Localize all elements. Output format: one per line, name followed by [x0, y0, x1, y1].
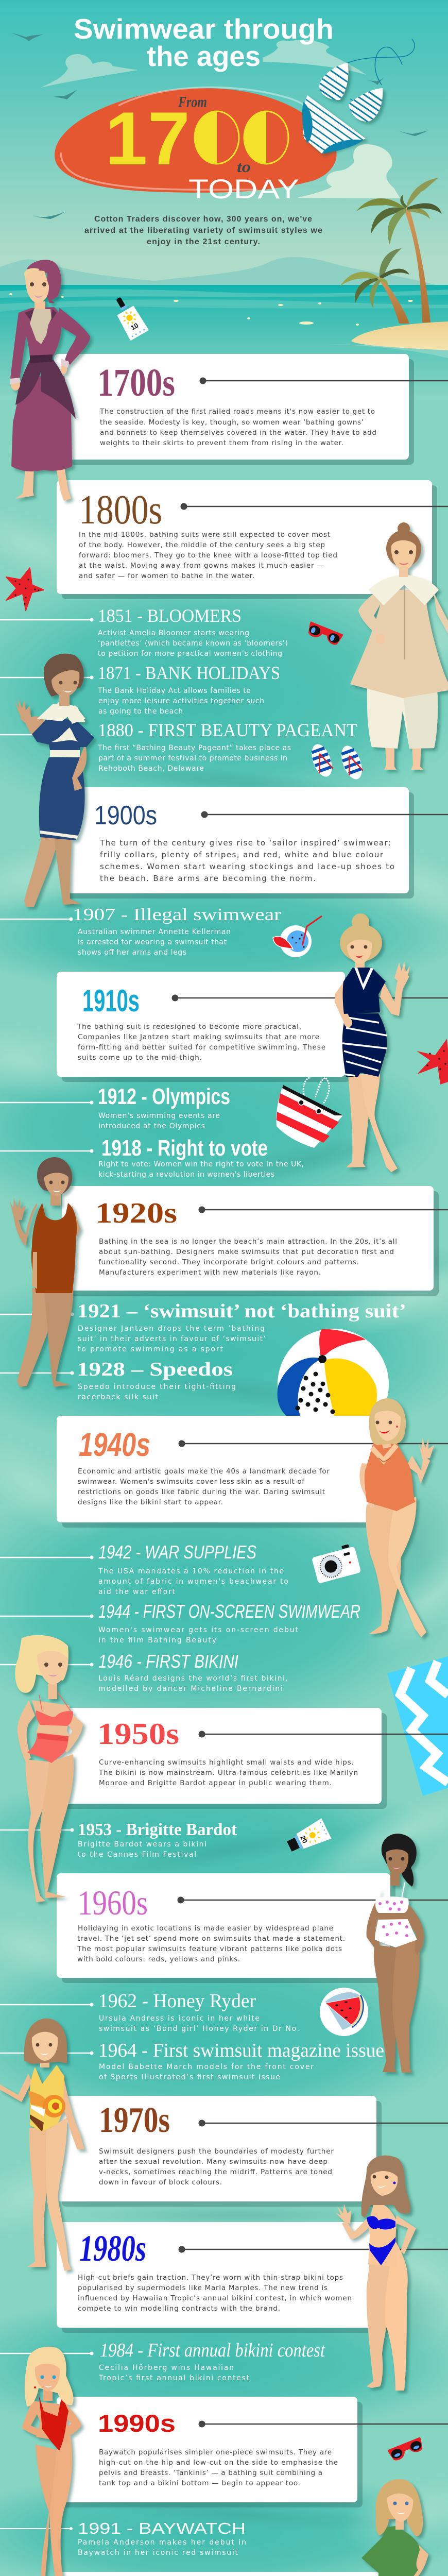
panel: 1700s	[54, 354, 448, 465]
text: 1910s: suits come up to the mid-thigh.	[78, 1054, 202, 1062]
heading: 1940s: 1940s	[79, 1426, 150, 1463]
text: 1928: racerback silk suit	[78, 1393, 159, 1401]
text: 1960s: The most popular swimsuits feature vibrant patterns like polka dots	[77, 1945, 342, 1953]
text: 1921: Designer Jantzen drops the term ‘bathing	[78, 1325, 265, 1333]
heading: 1920s: 1920s	[95, 1197, 177, 1229]
text: 1946: modelled by dancer Micheline Bernardini	[98, 1685, 283, 1693]
intro text: enjoy in the 21st century.	[147, 238, 260, 246]
heading: 1910s: 1910s	[82, 984, 140, 1018]
text: 1900s: The turn of the century gives rise to ‘sailor inspired’ swimwear:	[99, 838, 391, 848]
from: From	[178, 93, 207, 111]
timeline: 1912	[0, 1084, 230, 1130]
text: 1871: enjoy more leisure activities together such	[98, 697, 264, 705]
icon: starfish	[6, 568, 44, 611]
icon: striped bikini	[302, 39, 415, 158]
text: 1800s: of the body. However, the middle of the century sees a big step	[79, 541, 325, 549]
text: 1962	[99, 2014, 299, 2033]
text: 1964: of Sports Illustrated’s first swimsuit issue	[99, 2073, 280, 2081]
island	[322, 321, 448, 358]
text: 1970s: down in favour of block colours.	[99, 2178, 222, 2187]
text: 1964	[99, 2063, 314, 2081]
text: 1940s: Economic and artistic goals make the 40s a landmark decade for	[78, 1467, 330, 1476]
timeline: 1984	[0, 2340, 325, 2382]
text: 1920s: Bathing in the sea is no longer the beach’s main attraction. In the 20s, it’s all	[99, 1238, 397, 1246]
text: 1950s: Curve-enhancing swimsuits highlight small waists and wide hips.	[99, 1758, 354, 1767]
figure: 1950s woman	[15, 1635, 83, 1902]
icon: cocktail	[273, 916, 322, 957]
figure: 1980s woman	[336, 2156, 416, 2391]
text: 1970s: Swimsuit designers push the boundaries of modesty further	[99, 2147, 334, 2156]
text: 1928	[78, 1383, 236, 1401]
text: 1800s: and safer — for women to bathe in the water.	[79, 572, 254, 580]
text: 1880	[97, 744, 291, 773]
timeline: 1964	[0, 2040, 384, 2081]
text: 1991: Pamela Anderson makes her debut in	[78, 2538, 246, 2547]
figure: 1970s woman	[0, 2019, 84, 2271]
text: 1912	[98, 1112, 220, 1130]
heading: 1960s: 1960s	[78, 1883, 148, 1922]
text: 1940s: swimwear. Women's swimsuits cover less skin as a result of	[78, 1478, 305, 1486]
text: 1980s: compete to win modelling contracts with the brand.	[78, 2304, 280, 2313]
text: 1918	[98, 1160, 304, 1179]
text: 1984: Cecilia Hörberg wins Hawaiian	[99, 2364, 234, 2372]
text: 1960s: Holidaying in exotic locations is made easier by widespread plane	[78, 1924, 333, 1933]
today: TODAY	[188, 174, 299, 205]
text: 1900s: frilly collars, plenty of stripes, and red, white and blue colour	[100, 850, 384, 859]
figure: 1910s woman	[335, 913, 410, 1172]
text: 1946	[98, 1674, 288, 1693]
text: 1910s	[77, 1023, 325, 1062]
palm trees	[340, 178, 442, 324]
text: 1950s: Monroe and Brigitte Bardot appear in public wearing them.	[99, 1779, 332, 1787]
figure: 1940s woman	[359, 1398, 434, 1637]
panel: 2000s	[57, 2572, 448, 2576]
text: 1921: to promote swimming as a sport	[78, 1345, 223, 1353]
text: 1984: Tropic’s first annual bikini contest	[98, 2374, 250, 2382]
heading: 1700s: 1700s	[97, 361, 175, 404]
text: 1990s: Baywatch popularises simpler one-piece swimsuits. They are	[99, 2448, 332, 2456]
text: 1800s: forward: bloomers. They go to the knee with a loose-fitted top tied	[79, 551, 337, 560]
panel: 1950s	[57, 1708, 448, 1809]
timeline: 1944	[0, 1601, 360, 1645]
text: 1953	[78, 1840, 206, 1859]
panel: 1910s	[57, 972, 448, 1082]
zeros of 1700	[194, 111, 288, 164]
icon: camera	[311, 1543, 361, 1584]
text: 1700s: and bonnets to keep themselves covered in the water. They have to add	[100, 429, 376, 437]
heading: 1851: 1851 - BLOOMERS	[98, 605, 242, 626]
figure: 1900s woman	[15, 654, 94, 907]
text: 1953: Brigitte Bardot wears a bikini	[78, 1840, 206, 1849]
icon: sun cream bottle: 10	[129, 321, 140, 332]
figure: 1700s woman	[10, 260, 90, 501]
text: 1970s	[99, 2147, 334, 2187]
text: 1700s: weights to their skirts to prevent them from rising in the water.	[100, 439, 343, 447]
text: 1942: aid the war effort	[98, 1588, 175, 1596]
text: 1942: The USA mandates a 10% reduction in the	[98, 1567, 284, 1575]
text: 1921: suit’ in their adverts in favour of ‘swimsuit’	[78, 1335, 266, 1343]
text: 1871: as going to the beach	[98, 707, 183, 716]
timeline: 1928	[0, 1359, 236, 1401]
text: 1944: Women's swimwear gets its on-screen debut	[98, 1626, 299, 1634]
text: 1990s: high-cut on the hip and low-cut on the side to emphasise the	[99, 2459, 338, 2467]
text: 1942	[98, 1567, 288, 1596]
text: 1912: Women’s swimming events are	[98, 1112, 220, 1120]
to: to	[237, 158, 251, 176]
heading: 1907: 1907 - Illegal swimwear	[73, 905, 282, 924]
panel: 1900s	[62, 787, 448, 899]
text: 1950s	[98, 1758, 358, 1787]
heading: 1964: 1964 - First swimsuit magazine issue	[98, 2040, 384, 2061]
icon: sunglasses lower	[388, 2437, 425, 2463]
text: 1980s: popularised by supermodels like Marla Marples. The new trend is	[78, 2284, 328, 2292]
heading: 1980s: 1980s	[79, 2228, 146, 2269]
text: 1962: swimsuit as ‘Bond girl’ Honey Ryder in Dr No.	[99, 2025, 299, 2033]
text: 1960s	[77, 1924, 345, 1963]
heading: 1942: 1942 - WAR SUPPLIES	[98, 1541, 256, 1563]
intro text: Cotton Traders discover how, 300 years on, we've	[94, 215, 312, 224]
icon: beach ball	[278, 1329, 389, 1440]
figure: 1920s woman	[10, 1157, 80, 1387]
text: 1900s	[99, 838, 394, 883]
icon: sun cream bottle	[110, 293, 148, 340]
connector	[177, 1897, 448, 1903]
sea	[0, 285, 448, 401]
text: 1871	[97, 687, 264, 716]
connector	[199, 2420, 448, 2428]
icon: sun cream tube	[284, 1818, 331, 1857]
background: sky	[0, 0, 448, 289]
heading: 1950s: 1950s	[97, 1717, 179, 1751]
cloud: lower right	[297, 144, 400, 198]
text: 1953: to the Cannes Film Festival	[78, 1851, 196, 1859]
connector	[180, 503, 448, 510]
text: 1920s: functionality second. They incorporate bright colours and patterns.	[98, 1258, 359, 1266]
connector	[199, 2120, 448, 2127]
timeline: 1946	[0, 1651, 288, 1693]
text: 1918: kick-starting a revolution in women's liberties	[98, 1171, 274, 1179]
timeline: 1880	[0, 720, 357, 773]
connector	[172, 994, 448, 1002]
mountains	[0, 257, 448, 289]
text: 1907: is arrested for wearing a swimsuit that	[78, 938, 227, 946]
panel: 1970s	[57, 2096, 448, 2207]
connector	[201, 811, 448, 818]
text: 1962: Ursula Andress is iconic in her white	[99, 2014, 260, 2023]
timeline: 1962	[0, 1990, 299, 2033]
year 1700: 00	[199, 122, 265, 156]
text: 1940s: designs like the bikini start to appear.	[78, 1498, 223, 1506]
heading: 1944: 1944 - FIRST ON-SCREEN SWIMWEAR	[98, 1601, 360, 1622]
text: 1944	[98, 1626, 299, 1645]
panel: 1990s	[57, 2397, 448, 2507]
heading: 1912: 1912 - Olympics	[98, 1084, 230, 1109]
timeline: 1871	[0, 663, 280, 716]
connector	[178, 1440, 448, 1447]
title: Swimwear through	[74, 13, 334, 45]
intro text: arrived at the liberating variety of swimsuit styles we	[84, 226, 322, 235]
text: 1912: introduced at the Olympics	[98, 1122, 205, 1130]
text: 1907: Australian swimmer Annette Kellerman	[78, 928, 231, 936]
text: 1984	[98, 2364, 250, 2382]
icon: sun cream tube: 20	[299, 1834, 309, 1844]
text: 1900s: schemes. Women start wearing stockings and lace-up shoes to	[100, 862, 394, 871]
figure: 1990s woman	[22, 2347, 81, 2576]
timeline: 1991	[0, 2519, 246, 2557]
connector	[199, 1731, 448, 1737]
timeline: 1907	[0, 905, 282, 957]
icon: striped towel	[387, 1656, 448, 1796]
heading: 1880: 1880 - FIRST BEAUTY PAGEANT	[98, 720, 357, 740]
text: 1851	[98, 629, 288, 658]
text: 1990s	[99, 2448, 338, 2487]
intro text	[84, 215, 322, 246]
panel: 1940s	[57, 1416, 448, 1528]
heading: 1946: 1946 - FIRST BIKINI	[98, 1651, 238, 1672]
text: 1921	[78, 1325, 266, 1353]
text: 1907	[78, 928, 231, 957]
text: 1970s: after the sexual revolution. Many swimsuits now have deep	[99, 2158, 328, 2166]
text: 1944: in the film Bathing Beauty	[98, 1636, 216, 1645]
figure: 1960s woman	[367, 1834, 424, 2073]
text: 1928: Speedo introduce their tight-fitting	[78, 1383, 236, 1391]
text: 1970s: v-necks, sometimes reaching the midriff. Patterns are toned	[99, 2168, 332, 2176]
text: 1910s: The bathing suit is redesigned to become more practical.	[77, 1023, 301, 1031]
text: 1960s: travel. The ‘jet set’ spend more on swimsuits that made a statement.	[77, 1935, 345, 1943]
birds	[11, 33, 428, 219]
figure: 1800s woman	[350, 522, 448, 770]
text: 1851: ‘pantlettes’ (which became known as ‘bloomers’)	[98, 639, 288, 648]
text: 1940s	[78, 1467, 330, 1506]
text: 1900s: the beach. Bare arms are becoming the norm.	[100, 874, 316, 883]
text: 1991	[78, 2538, 246, 2557]
text: 1980s: High-cut briefs gain traction. They’re worn with thin-strap bikini tops	[78, 2274, 343, 2282]
connector	[199, 1207, 448, 1213]
text: 1940s: restrictions on goods like fabric during the war. Daring swimsuit	[78, 1488, 325, 1496]
text: 1980s	[78, 2274, 352, 2313]
text: 1880: Rehoboth Beach, Delaware	[98, 765, 204, 773]
icon: sunglasses	[306, 621, 343, 647]
heading: 1962: 1962 - Honey Ryder	[98, 1990, 256, 2012]
connector	[178, 2246, 448, 2252]
text: 1991: Baywatch in her iconic red swimsuit	[78, 2549, 238, 2557]
heading: 1984: 1984 - First annual bikini contest	[100, 2340, 325, 2361]
heading: 1991: 1991 - BAYWATCH	[78, 2519, 246, 2537]
panel: 1980s	[57, 2222, 448, 2333]
text: 1980s: influenced by Hawaiian Tropic’s annual bikini contest, in which women	[78, 2294, 352, 2302]
year 1700: 17	[105, 96, 190, 180]
icon: watermelon plate small	[320, 1988, 368, 2036]
text: 1964: Model Babette March models for the front cover	[99, 2063, 314, 2071]
sea highlights	[0, 289, 448, 312]
panel: 1960s	[57, 1873, 448, 1983]
timeline: 1851	[0, 605, 288, 658]
heading: 1900s: 1900s	[94, 801, 157, 831]
text: 1920s	[98, 1238, 397, 1277]
text: 1800s: at the waist. Moving away from gowns makes it much easier —	[79, 562, 324, 570]
text: 1907: shows off her arms and legs	[78, 948, 186, 957]
text: 1990s: pelvis and breasts. ‘Tankinis’ — a bathing suit combining a	[99, 2469, 322, 2477]
heading: 1970s: 1970s	[99, 2100, 170, 2140]
heading: 1928: 1928 – Speedos	[77, 1359, 233, 1380]
timeline: 1921	[0, 1300, 406, 1353]
text: 1910s: Companies like Jantzen start making swimsuits that are more	[78, 1033, 319, 1041]
icon: beach bag	[277, 1078, 343, 1148]
heading: 1871: 1871 - BANK HOLIDAYS	[98, 663, 280, 683]
text: 1871: The Bank Holiday Act allows families to	[97, 687, 251, 695]
panel: 1920s	[62, 1186, 448, 1296]
heading: 1921: 1921 – ‘swimsuit’ not ‘bathing suit’	[77, 1300, 406, 1322]
text: 1851: to petition for more practical women’s clothing	[98, 650, 282, 658]
text: 1910s: form-fitting and better suited for competitive swimming. These	[78, 1043, 325, 1052]
text: 1960s: with bold colours: reds, yellows and pinks.	[77, 1955, 240, 1963]
figure: 2000s woman	[361, 2479, 441, 2576]
timeline: 1942	[0, 1541, 288, 1596]
text: 1700s	[99, 408, 376, 447]
badge: from 1700 to today	[55, 88, 337, 205]
icon: flip flops	[308, 741, 366, 782]
text: 1700s: The construction of the first railed roads means it's now easier to get to	[99, 408, 375, 416]
text: 1880: The first “Bathing Beauty Pageant” takes place as	[97, 744, 291, 752]
title: the ages	[147, 40, 261, 72]
text: 1942: amount of fabric in women's beachwear to	[98, 1578, 288, 1586]
timeline: 1953	[0, 1820, 237, 1859]
text: 1700s: the seaside. Modesty is key, though, so women wear ‘bathing gowns’	[100, 418, 364, 427]
heading: 1990s: 1990s	[98, 2410, 176, 2437]
text: 1800s: In the mid-1800s, bathing suits were still expected to cover most	[79, 531, 330, 539]
text: 1946: Louis Réard designs the world’s first bikini,	[98, 1674, 288, 1683]
cloud: behind title	[263, 40, 366, 75]
text: 1950s: The bikini is now mainstream. Ultra-famous celebrities like Marilyn	[98, 1769, 358, 1777]
text: 1918: Right to vote: Women win the right to vote in the UK,	[98, 1160, 304, 1168]
text: 1851: Activist Amelia Bloomer starts wearing	[98, 629, 249, 637]
heading: 1953: 1953 - Brigitte Bardot	[78, 1820, 237, 1839]
title	[74, 13, 334, 72]
text: 1920s: Manufacturers experiment with new materials like rayon.	[99, 1268, 321, 1277]
text: 1880: part of a summer festival to promote business in	[98, 754, 287, 762]
heading: 1800s: 1800s	[79, 487, 162, 533]
heading: 1918: 1918 - Right to vote	[101, 1136, 268, 1161]
text: 1920s: about sun-bathing. Designers make swimsuits that put decoration first and	[99, 1248, 394, 1256]
text: 1990s: tank top and a bikini bottom — begin to appear too.	[99, 2479, 300, 2487]
icon: starfish right	[417, 1039, 448, 1084]
cloud: upper left	[41, 54, 137, 88]
text: 1800s	[79, 531, 337, 580]
panel: 1800s	[57, 480, 448, 599]
timeline: 1918	[0, 1136, 304, 1179]
connector	[200, 377, 448, 384]
